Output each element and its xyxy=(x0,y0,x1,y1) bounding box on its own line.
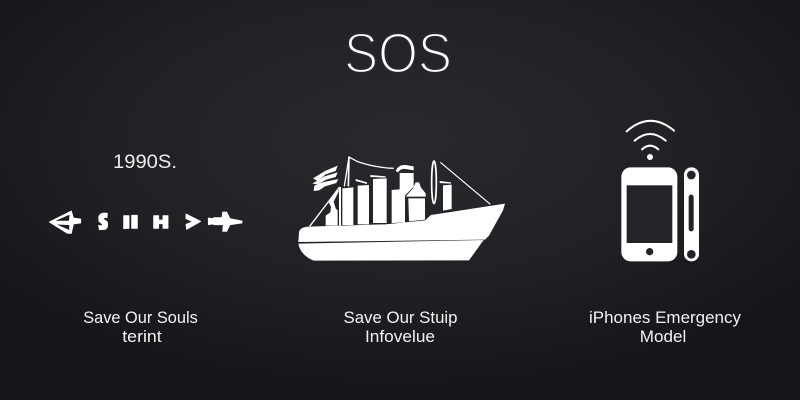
ship keel xyxy=(298,240,484,261)
aft container xyxy=(443,185,452,211)
caption: save our ship: Infovelue xyxy=(365,328,435,346)
caption: iphones emergency model xyxy=(589,309,742,346)
letter glyph: I I xyxy=(124,215,137,229)
deck house xyxy=(406,182,426,221)
crane and mast strip xyxy=(326,187,341,226)
icon: cargo ship xyxy=(298,157,505,261)
caption: save our souls xyxy=(83,309,198,346)
containers xyxy=(342,187,353,225)
caption: save our souls: terint xyxy=(122,328,162,346)
letter glyph: arrow xyxy=(186,214,201,229)
funnel cap xyxy=(396,165,414,172)
letter glyph: S xyxy=(99,213,108,230)
date label: 1990S. xyxy=(113,151,177,173)
title: SOS xyxy=(344,22,452,86)
icon: wifi signal xyxy=(627,121,674,160)
icon: phone side xyxy=(684,167,699,261)
caption: save our souls: Save Our Souls xyxy=(83,309,198,327)
icon: paper plane xyxy=(49,211,81,233)
icon: aircraft xyxy=(208,212,242,231)
caption: save our ship xyxy=(344,309,458,346)
ship hull xyxy=(298,204,505,242)
letter glyph: H xyxy=(154,216,168,228)
container lids xyxy=(356,175,451,184)
icon: phone front xyxy=(621,167,677,261)
funnel block xyxy=(392,173,414,223)
icon row: plane, letters and aircraft xyxy=(49,211,242,233)
caption: iphones emergency model: iPhones Emergency xyxy=(589,309,742,327)
rigging xyxy=(310,157,490,226)
caption: save our ship: Save Our Stuip xyxy=(344,309,458,327)
caption: iphones emergency model: Model xyxy=(640,328,686,346)
flag xyxy=(312,166,338,191)
